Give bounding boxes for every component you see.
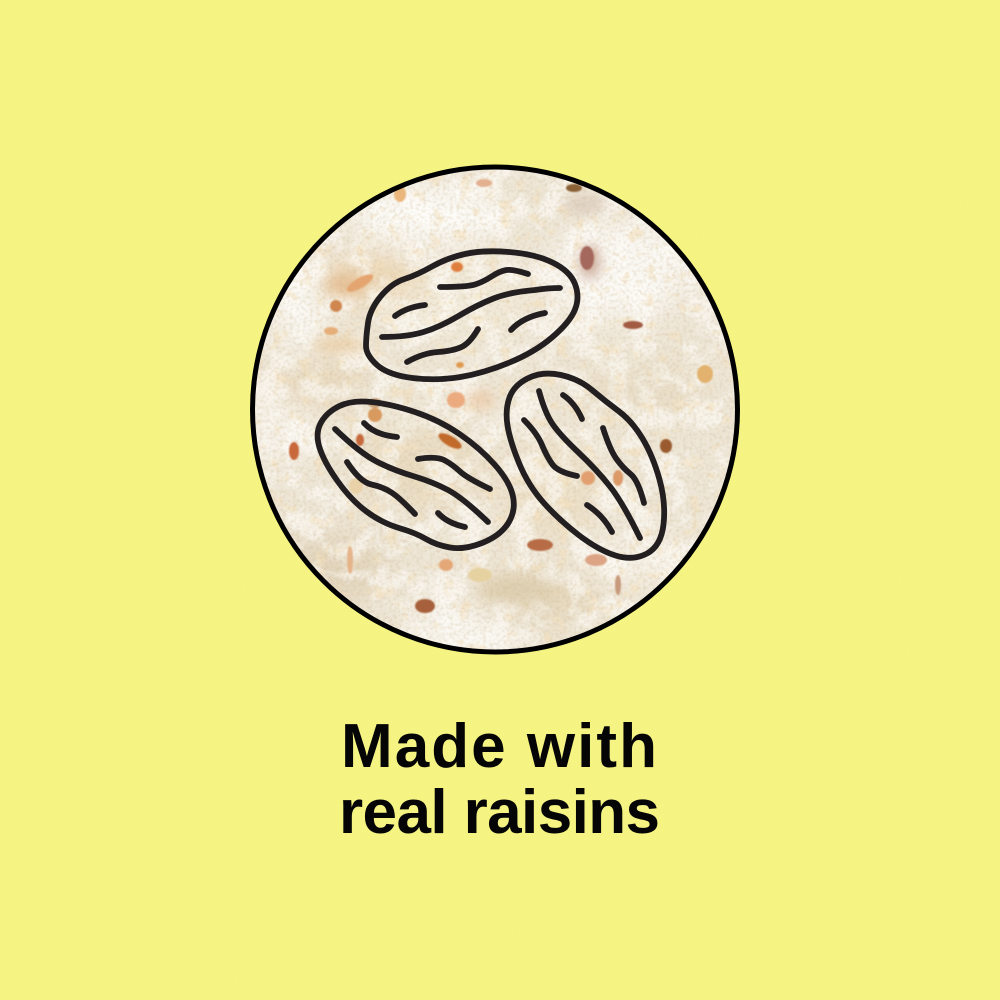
panel: oat texture circle xyxy=(250,165,740,655)
title: Made with real raisins xyxy=(339,712,660,847)
title: Made with real raisins: Made with xyxy=(341,712,657,781)
icon: three raisins xyxy=(318,251,664,558)
icon: right raisin xyxy=(507,374,664,558)
circle outline xyxy=(252,167,738,652)
infographic canvas xyxy=(250,164,740,834)
icon: left raisin xyxy=(318,402,514,548)
title: Made with real raisins: real raisins xyxy=(339,778,660,847)
icon: top raisin xyxy=(366,251,578,379)
